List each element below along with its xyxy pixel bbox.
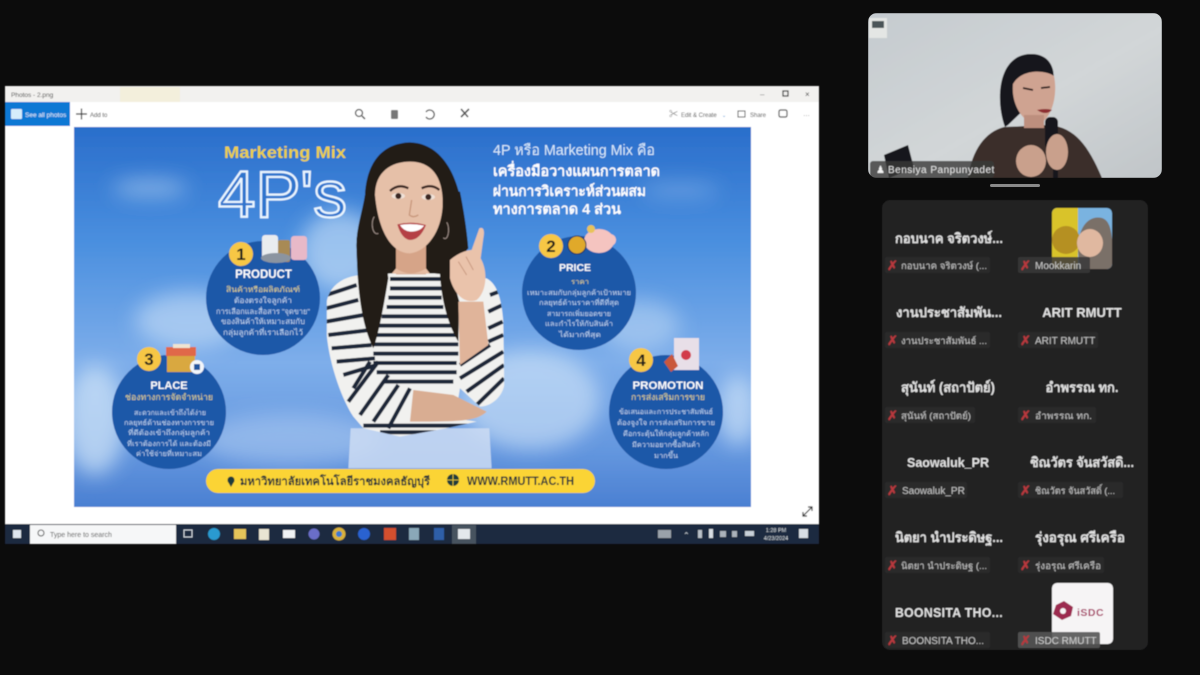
body text: promotion [617,392,715,460]
participant: ARIT RMUTT: ARIT RMUTT [1042,305,1122,320]
clouds [65,179,758,475]
body text: product: ของสินค้าให้เหมาะสมกับ [221,317,305,326]
body text: promotion: การส่งเสริมการขาย [631,392,705,402]
toolbar: … [803,111,810,118]
toolbar: ⌄ [722,113,726,119]
panel: speaker video [868,13,1162,178]
body text: place: ค่าใช้จ่ายที่เหมาะสม [136,449,202,458]
participant: BOONSITA: BOONSITA THO... [902,636,984,647]
taskbar: 4/23/2024 [764,536,788,542]
intro text: ผ่านการวิเคราะห์ส่วนผสม [493,182,646,200]
heading: 4P's outlined: 4P's [218,157,347,231]
icon: piggy bank and coin [568,225,616,254]
body text: place: ที่เราต้องการได้ และต้องมี [127,439,211,448]
participant: ARIT RMUTT: ARIT RMUTT [1035,336,1095,347]
toolbar: Add to [90,113,108,119]
divider handle [990,184,1040,187]
participant: row 3 left: สุนันท์ (สถาปัตย์) [901,410,971,422]
panel: price [522,225,636,350]
body text: promotion: ต้องจูงใจ การส่งเสริมการขาย [617,418,715,427]
person: woman pointing up [320,142,520,468]
body text: promotion: มีความอยากซื้อสินค้า [632,438,700,449]
footer pill: university and website: WWW.RMUTT.AC.TH [467,476,574,488]
infographic image [65,127,758,507]
body text: product: ต้องตรงใจลูกค้า [234,296,292,305]
participant: row 3 right [1018,380,1118,423]
window: photos app [5,86,819,544]
participant: row 4 right: ✗ [1020,483,1031,498]
icon: product bottles [261,235,307,263]
window title bar: × [805,90,810,99]
participant: Saowaluk_PR: Saowaluk_PR [902,486,965,497]
footer pill: university and website [206,469,595,493]
panel: product [206,235,320,355]
participant: Mookkarin [1018,208,1112,273]
participant: row 4 right: ชิณวัตร จันสวัสดิ... [1030,455,1134,470]
toolbar: ✂ [669,109,678,119]
participant: row 4 right: ชิณวัตร จันสวัสดิ์ (... [1035,483,1115,497]
participant: BOONSITA: BOONSITA THO... [895,605,1003,620]
toolbar: Edit & Create [681,113,717,119]
footer pill: university and website: มหาวิทยาลัยเทคโนโลยีราชมงคลธัญบุรี [240,473,431,489]
participant: row 3 right: อำพรรณ ทก. [1035,411,1092,422]
icon: expand arrow [803,507,812,516]
body text: price: กลยุทธ์ด้านราคาที่ดีที่สุด [539,298,619,307]
participant: Saowaluk_PR: Saowaluk_PR [907,456,989,470]
body text: place: สะดวกและเข้าถึงได้ง่าย [134,408,206,417]
participant: row 3 right: ✗ [1020,408,1031,423]
window title bar: Photos - 2.png [11,92,54,99]
toolbar: See all photos [25,112,67,119]
participant: ARIT RMUTT: ✗ [1020,333,1031,348]
intro text: 4P หรือ Marketing Mix คือ [493,142,655,159]
participant: row 5 left: นิตยา นำประดิษฐ (... [901,561,987,572]
intro text: ทางการตลาด 4 ส่วน [493,202,621,218]
participant: row 3 left: สุนันท์ (สถาปัตย์) [901,379,995,396]
participant: row 3 right: อำพรรณ ทก. [1046,380,1118,395]
participant: row 3 left [885,379,995,423]
speaker name tag: Bensiya Panpunyadet [888,165,995,176]
participant: ISDC RMUTT: iSDC [1077,607,1104,619]
body text: place [124,392,214,458]
speaker name tag [870,161,995,178]
badge: 1: 1 [236,245,246,264]
participant: BOONSITA: ✗ [887,633,898,648]
body text: place: ช่องทางการจัดจำหน่าย [125,392,213,402]
badge: 4: 4 [636,351,646,370]
badge: 2: 2 [546,237,556,256]
panel: participants [882,200,1148,650]
speaker name tag: ♟ [876,165,885,176]
window title bar [5,86,819,102]
speaker figure [968,54,1102,178]
participant: ARIT RMUTT [1018,305,1122,348]
body text: price: เหมาะสมกับกลุ่มลูกค้าเป้าหมาย [527,289,631,297]
wall thermostat [869,18,887,38]
body text: place: กลยุทธ์ด้านช่องทางการขาย [124,419,214,427]
participant: row 5 left: ✗ [887,558,898,573]
participant: ISDC RMUTT: ISDC RMUTT [1035,636,1097,647]
label: place: PLACE [150,380,188,392]
toolbar [5,102,810,126]
participant: row 5 left [885,530,1003,573]
body text: place: ที่ดีต้องเข้าถึงกลุ่มลูกค้า [128,428,210,437]
body text: promotion: คือกระตุ้นให้กลุ่มลูกค้าหลัก [623,429,709,438]
body text: product: กลุ่มลูกค้าที่เราเลือกไว้ [223,327,303,337]
participant: Saowaluk_PR: ✗ [887,483,898,498]
label: promotion: PROMOTION [632,380,704,392]
participant: ISDC RMUTT [1018,583,1113,648]
intro text [493,142,660,218]
taskbar: ⌃ [683,531,690,540]
participant: row 1 left: กอบนาค จริตวงษ์ (... [901,260,987,272]
body text: price: สามารถเพิ่มยอดขาย [547,309,611,318]
body text: product [216,285,310,337]
taskbar: Type here to search [50,532,112,539]
participant: row 2 left: ✗ [887,333,898,348]
participant: Mookkarin: ✗ [1020,258,1031,273]
participant: row 5 right: รุ่งอรุณ ศรีเครือ [1035,530,1125,546]
participant: row 2 left [885,305,1002,348]
body text: price: ได้มากที่สุด [558,330,601,339]
label: product: PRODUCT [235,269,292,281]
body text: product: สินค้าหรือผลิตภัณฑ์ [226,285,300,294]
toolbar: Share [750,113,767,119]
intro text: เครื่องมือวางแผนการตลาด [493,160,660,180]
participant: row 1 left: กอบนาค จริตวงษ์... [895,230,1003,246]
body text: product: การเลือกและสื่อสาร "จุดขาย" [216,306,310,316]
body text: promotion: ข้อเสนอและการประชาสัมพันธ์ [619,408,713,416]
body text: price: ราคา [571,279,589,286]
participant: row 1 left: ✗ [887,258,898,273]
participant: row 2 left: งานประชาสัมพันธ์ ... [901,335,987,347]
body text: promotion: มากขึ้น [654,449,678,460]
icon: promotion phone [664,338,699,372]
panel: place [112,344,226,469]
participant: row 5 left: นิตยา นำประดิษฐ... [895,530,1003,547]
body text: price [527,279,631,339]
participant: row 5 right [1018,530,1125,573]
taskbar: 1:28 PM [766,528,787,534]
participant: Saowaluk_PR [885,456,989,498]
participant: row 4 right [1018,455,1134,498]
label: price: PRICE [559,262,591,274]
badge: 3: 3 [144,350,154,369]
panel: promotion [609,338,723,469]
participant: BOONSITA [885,605,1003,648]
window title bar: – [760,90,765,99]
participant: row 3 left: ✗ [887,408,898,423]
participant: row 1 left [885,230,1003,273]
participant: Mookkarin: Mookkarin [1035,261,1081,272]
participant: ISDC RMUTT: ✗ [1020,633,1031,648]
heading: Marketing Mix: Marketing Mix [224,144,347,162]
taskbar [5,524,819,544]
participant: row 5 right: ✗ [1020,558,1031,573]
device on table [884,145,914,178]
body text: price: และกำไรให้กับสินค้า [545,319,613,328]
icon: shop [166,344,204,374]
participant: row 5 right: รุ่งอรุณ ศรีเครือ [1035,560,1101,572]
participant: row 2 left: งานประชาสัมพัน... [896,305,1002,320]
